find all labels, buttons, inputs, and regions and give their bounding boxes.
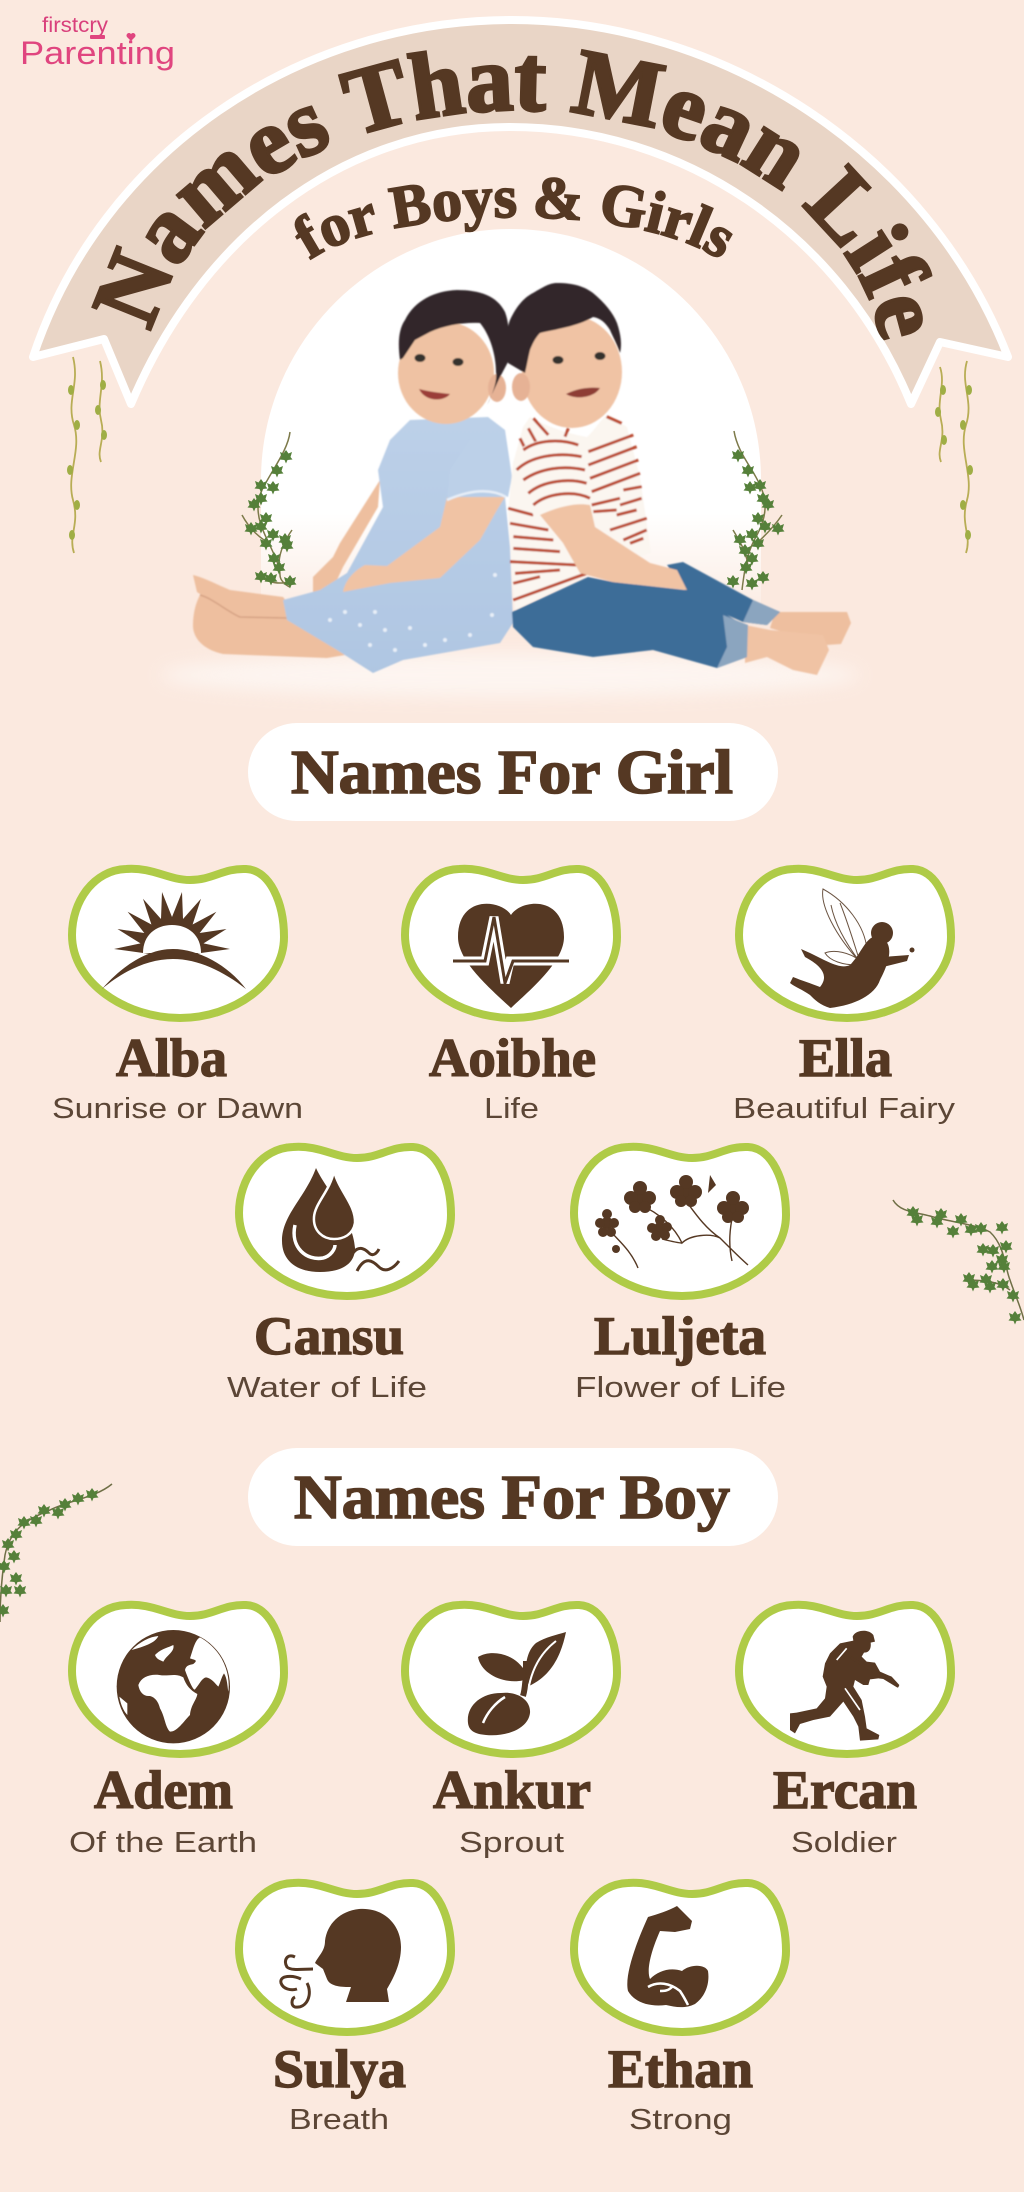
girl back arm [313,480,380,597]
side vine left [0,1484,112,1622]
hanging vines right [940,361,969,553]
card: Luljeta: Luljeta [594,1306,766,1366]
card: Ethan: Ethan [608,2039,753,2099]
card: Ankur: Ankur [433,1760,591,1820]
line between the girl's legs [200,595,287,618]
card: Adem: Adem [94,1760,233,1820]
logo: FirstCry Parenting [20,14,175,71]
boy face [522,316,622,428]
heading pill: Names For Boy [248,1448,778,1546]
icon: soldier [790,1631,899,1741]
title: Names That Mean Life: Names That Mean Life [91,48,932,340]
girl face [398,322,494,424]
boy eyes and mouth [552,352,606,397]
card: Ercan [739,1605,951,1859]
girl sleeve cuff [447,440,512,500]
boy arm [540,504,687,590]
card: Adem [69,1605,284,1859]
boy jeans [512,562,780,668]
boy front foot [745,625,829,675]
girl ear [488,374,506,402]
icon: flowers [595,1175,749,1268]
heading pill: Names For Girl [248,723,778,821]
card: Luljeta [574,1147,786,1404]
logo: FirstCry Parenting: firstcry [42,14,109,37]
icon: heart with heartbeat [453,904,569,1008]
girl front arm and hand [343,497,505,592]
card: Adem: Of the Earth [69,1827,257,1859]
girl dress eyelets [328,460,497,652]
card: Ethan [574,1883,786,2136]
boy shirt sleeve with stripes [513,439,592,515]
panel: girl names [52,869,956,1404]
arch vine right [726,431,784,590]
card: Ankur: Sprout [459,1827,564,1859]
logo: FirstCry Parenting: Parenting [20,35,175,71]
card: Cansu [227,1147,451,1404]
icon: fairy [790,889,914,1008]
arch vine left [242,432,296,588]
card: Aoibhe: Life [484,1093,539,1125]
white arch backdrop [261,229,761,660]
heading pill: Names For Girl: Names For Girl [291,739,733,807]
card: Ethan: Strong [629,2104,732,2136]
icon: flexed arm [627,1906,708,2007]
boy shirt [508,415,651,610]
card: Ella: Ella [799,1028,892,1088]
hanging vine leaves right [935,385,973,540]
card: Aoibhe [405,869,617,1125]
icon: globe [117,1630,230,1743]
card: Ella: Beautiful Fairy [733,1093,956,1125]
heading pill: Names For Boy: Names For Boy [294,1464,730,1532]
card: Aoibhe: Aoibhe [429,1028,596,1088]
girl dress [283,417,513,673]
girl legs [193,575,345,658]
icon: sunrise [102,892,246,989]
boy shirt torso stripes [508,417,647,600]
card: Cansu: Cansu [254,1306,404,1366]
icon: sprout [468,1632,566,1735]
card: Luljeta: Flower of Life [575,1372,786,1404]
card: Ercan: Ercan [773,1760,917,1820]
hanging vine leaves left [67,380,107,540]
banner ribbon [33,20,1008,404]
card: Ercan: Soldier [791,1827,897,1859]
card: Alba: Sunrise or Dawn [52,1093,303,1125]
card: Cansu: Water of Life [227,1372,427,1404]
hanging vines left [71,357,102,553]
panel: boy names [69,1605,951,2136]
icon: water drops [282,1168,399,1272]
girl eyes and mouth [414,354,464,399]
card: Ankur [405,1605,617,1859]
card: Ella [733,869,956,1125]
boy ear [512,373,530,401]
boy hair [507,283,621,373]
photo: twin babies sitting back to back [193,283,851,675]
subtitle: for Boys & Girls: for Boys & Girls [294,177,733,260]
card: Sulya: Sulya [273,2039,406,2099]
boy back foot [770,612,851,645]
side vine right [893,1200,1024,1324]
girl hair [399,290,509,405]
card: Sulya: Breath [289,2104,389,2136]
icon: head breathing [281,1909,401,2007]
card: Sulya [239,1883,451,2136]
floor glow under the babies [160,653,860,697]
card: Alba [52,869,303,1125]
boy jeans cuffs [717,600,780,668]
card: Alba: Alba [116,1028,227,1088]
